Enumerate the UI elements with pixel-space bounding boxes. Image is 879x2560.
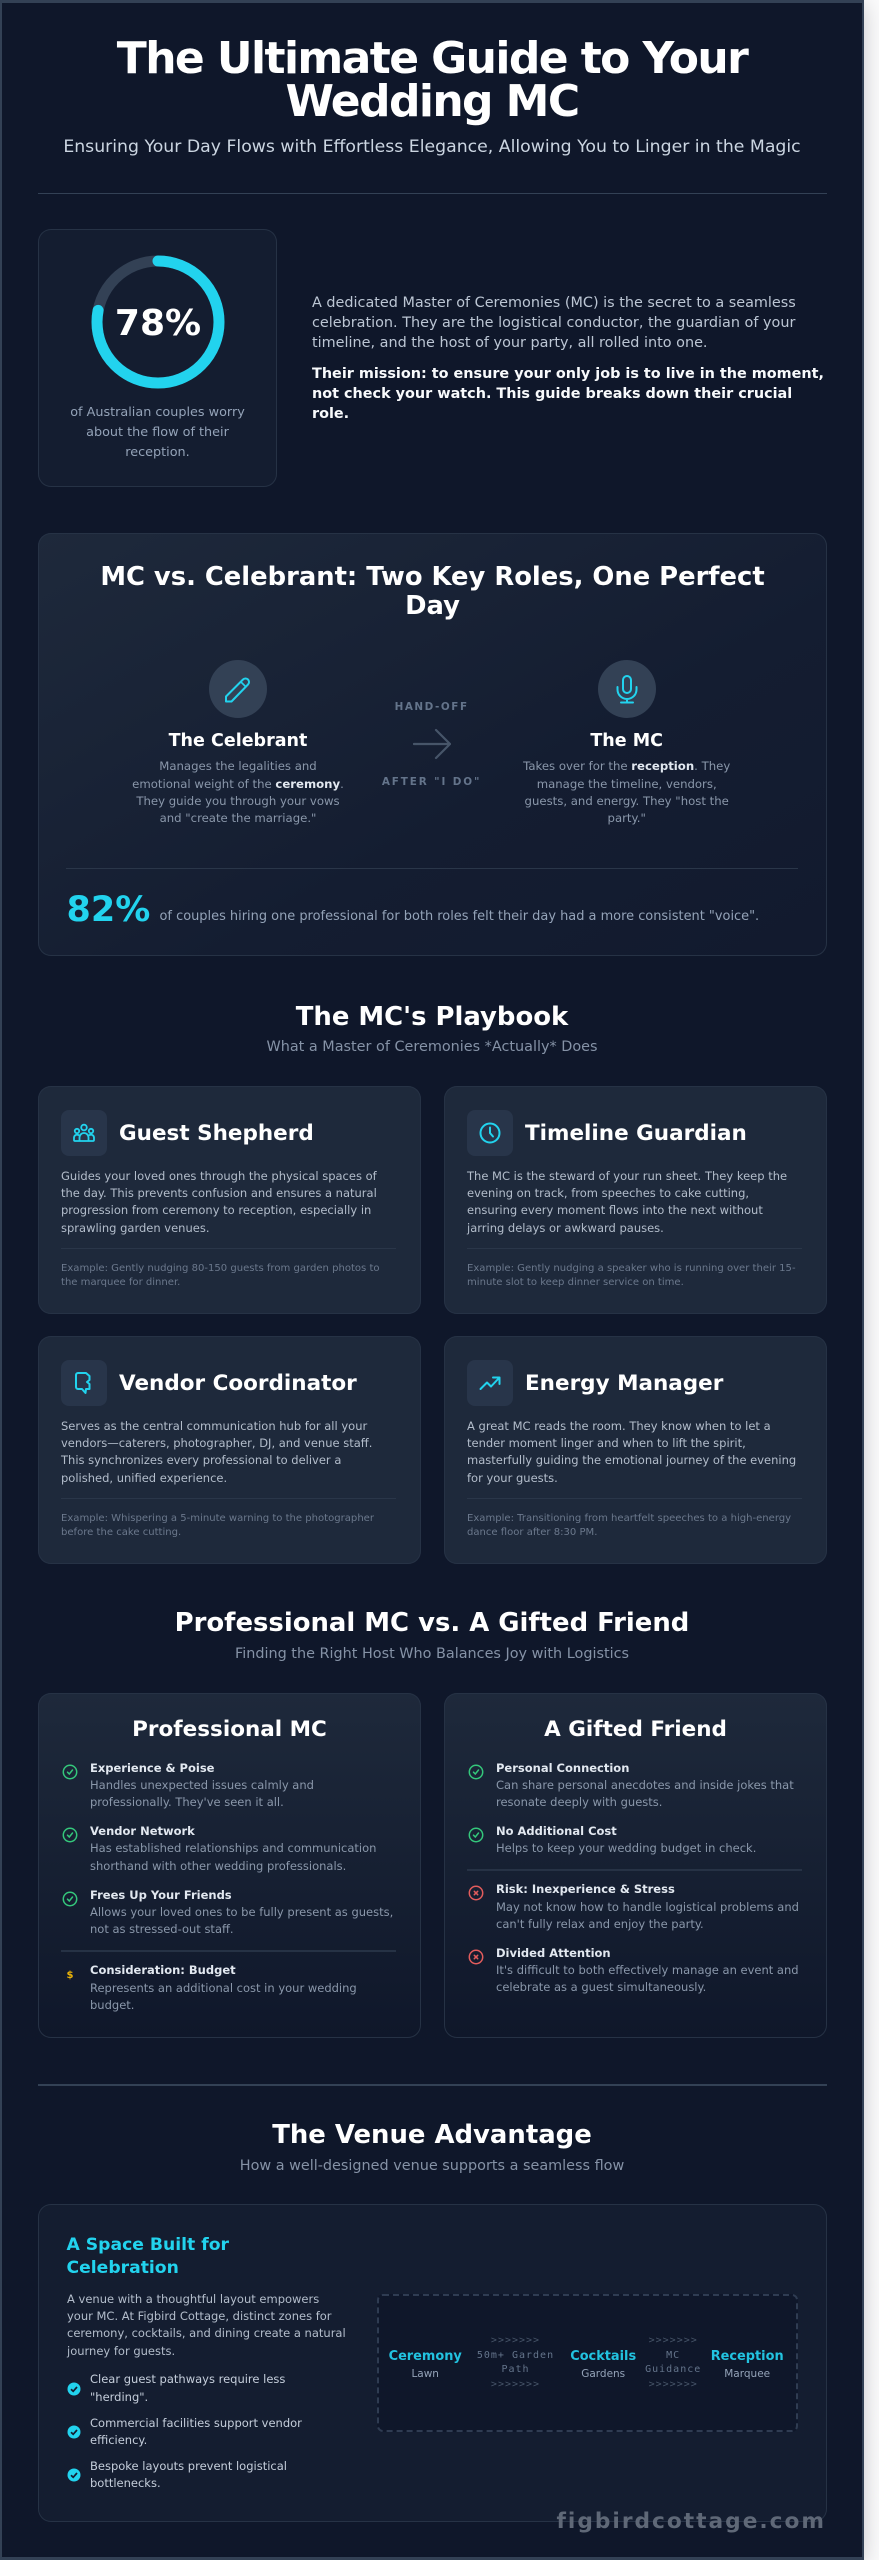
card title: Guest Shepherd: [119, 1120, 314, 1146]
zone: cocktails: Cocktails: [570, 2348, 636, 2364]
panel: guest shepherd: [38, 1086, 421, 1314]
item: frees up friends: Allows your loved ones to be fully present as guests,: [90, 1905, 393, 1919]
panel: 78% stat card: [38, 229, 277, 487]
panel: MC vs Celebrant: [38, 533, 827, 956]
list item: pathways: Clear guest pathways require less: [90, 2372, 285, 2386]
card title: Vendor Coordinator: [119, 1370, 357, 1396]
card body: polished, unified experience.: [61, 1471, 227, 1485]
hand-off label: HAND-OFF: [395, 701, 469, 713]
role: the celebrant: emotional weight of the ceremony.: [132, 777, 344, 791]
list item: layouts: [68, 2459, 287, 2490]
path: garden: Path: [501, 2364, 530, 2375]
list item: facilities: Commercial facilities support vendor: [90, 2416, 302, 2430]
item: no additional cost: No Additional Cost: [496, 1824, 617, 1838]
card body: A great MC reads the room. They know when to let a: [467, 1419, 771, 1433]
path: MC guidance: >>>>>>>: [649, 2379, 698, 2390]
subheading: playbook: What a Master of Ceremonies *Actually* Does: [267, 1039, 597, 1055]
zone: ceremony: [389, 2348, 462, 2380]
item: frees up friends: Frees Up Your Friends: [90, 1888, 232, 1902]
panel: venue: [38, 2204, 827, 2522]
stat caption: [70, 405, 245, 460]
column title: Professional MC: [132, 1717, 327, 1742]
card example: [61, 1263, 380, 1288]
role: the celebrant: Manages the legalities and: [159, 759, 317, 773]
card example: Example: Gently nudging 80-150 guests from garden photos to: [61, 1263, 380, 1274]
list item: pathways: [68, 2372, 285, 2404]
heading: playbook: The MC's Playbook: [296, 1002, 568, 1032]
card body: masterfully guiding the emotional journey of the evening: [467, 1453, 796, 1467]
list item: facilities: [68, 2416, 302, 2447]
list item: pathways: "herding".: [90, 2390, 148, 2404]
venue heading: [66, 2235, 229, 2278]
mission statement: [312, 366, 824, 422]
after I do label: AFTER "I DO": [382, 776, 481, 788]
role: the MC: Takes over for the reception. They: [523, 759, 730, 773]
subheading: professional vs friend: Finding the Right Host Who Balances Joy with Logistics: [235, 1646, 629, 1662]
intro paragraph: celebration. They are the logistical conductor, the guardian of your: [312, 315, 795, 331]
venue paragraph: your MC. At Figbird Cottage, distinct zones for: [67, 2309, 332, 2323]
title: Wedding MC: [285, 76, 579, 127]
item: personal connection: Can share personal anecdotes and inside jokes that: [496, 1778, 794, 1792]
role: the celebrant: The Celebrant: [169, 731, 307, 751]
path: garden: >>>>>>>: [491, 2379, 540, 2390]
stat caption: about the flow of their: [86, 425, 229, 440]
role: the MC: The MC: [590, 731, 663, 751]
role: the MC: manage the timeline, vendors,: [537, 777, 717, 791]
zone: cocktails: [570, 2348, 636, 2380]
heading: [100, 562, 765, 620]
item: frees up friends: [62, 1888, 393, 1936]
card example: [467, 1263, 796, 1288]
list item: layouts: Bespoke layouts prevent logistical: [90, 2459, 287, 2473]
panel: vendor coordinator: [38, 1336, 421, 1564]
intro paragraph: [312, 295, 796, 351]
item: vendor network: Vendor Network: [90, 1824, 195, 1838]
zone: reception: Marquee: [724, 2368, 770, 2380]
role: the celebrant: and "create the marriage.": [160, 811, 316, 825]
card example: minute slot to keep dinner service on time.: [467, 1277, 684, 1288]
title: The Ultimate Guide to Your: [117, 33, 747, 84]
icon: clock: [467, 1110, 513, 1156]
card body: progression from ceremony to reception, especially in: [61, 1203, 371, 1217]
card body: sprawling garden venues.: [61, 1221, 209, 1235]
subtitle: Ensuring Your Day Flows with Effortless Elegance, Allowing You to Linger in the Magic: [63, 137, 801, 157]
panel: professional MC: [38, 1693, 421, 2038]
watermark: figbirdcottage.com: [556, 2509, 826, 2534]
stat caption: reception.: [125, 445, 190, 460]
role: the MC: guests, and energy. They "host the: [525, 794, 729, 808]
card body: vendors—caterers, photographer, DJ, and venue staff.: [61, 1436, 372, 1450]
list item: facilities: efficiency.: [90, 2433, 147, 2447]
chart: 78% progress ring: [92, 256, 224, 388]
item: budget consideration: Represents an additional cost in your wedding: [90, 1981, 357, 1995]
path: MC guidance: MC: [666, 2350, 680, 2361]
card example: Example: Gently nudging a speaker who is running over their 15-: [467, 1263, 796, 1274]
venue paragraph: journey for guests.: [67, 2344, 175, 2358]
item: vendor network: shorthand with other wedding professionals.: [90, 1859, 346, 1873]
panel: energy manager: [444, 1336, 827, 1564]
item: experience: [62, 1761, 314, 1809]
path: garden: >>>>>>>: [491, 2335, 540, 2346]
item: personal connection: resonate deeply with guests.: [496, 1795, 662, 1809]
card body: tender moment linger and when to lift the spirit,: [467, 1436, 746, 1450]
item: vendor network: [62, 1824, 376, 1873]
venue heading: Celebration: [66, 2258, 179, 2278]
item: risk: can't fully relax and enjoy the party.: [496, 1917, 704, 1931]
list item: layouts: bottlenecks.: [90, 2476, 161, 2490]
item: divided attention: It's difficult to both effectively manage an event and: [496, 1963, 799, 1977]
item: experience: professionally. They've seen it all.: [90, 1795, 284, 1809]
arrow: [413, 729, 451, 759]
intro paragraph: A dedicated Master of Ceremonies (MC) is the secret to a seamless: [312, 295, 796, 311]
venue heading: A Space Built for: [66, 2235, 229, 2255]
diagram: venue flow: [376, 2294, 798, 2432]
heading: venue: The Venue Advantage: [272, 2120, 592, 2150]
intro text block: [312, 295, 824, 422]
item: budget consideration: [66, 1963, 357, 2012]
role: the celebrant: They guide you through your vows: [136, 794, 340, 808]
stat description: of couples hiring one professional for both roles felt their day had a more consistent "voice".: [160, 909, 759, 924]
path: MC guidance: >>>>>>>: [649, 2335, 698, 2346]
zone: reception: Reception: [711, 2348, 784, 2364]
stat: 82%: 82%: [66, 890, 150, 930]
item: frees up friends: not as stressed-out staff.: [90, 1922, 234, 1936]
item: no additional cost: [468, 1824, 756, 1855]
card body: Serves as the central communication hub for all your: [61, 1419, 367, 1433]
item: experience: Handles unexpected issues calmly and: [90, 1778, 314, 1792]
card example: dance floor after 8:30 PM.: [467, 1527, 597, 1538]
card body: ensuring every moment flows into the next without: [467, 1203, 763, 1217]
heading: MC vs. Celebrant: Two Key Roles, One Perfect: [100, 562, 765, 592]
venue paragraph: ceremony, cocktails, and dining create a natural: [67, 2326, 346, 2340]
path: MC guidance: [645, 2335, 701, 2390]
item: personal connection: Personal Connection: [496, 1761, 629, 1775]
card example: Example: Transitioning from heartfelt speeches to a high-energy: [467, 1513, 791, 1524]
item: budget consideration: budget.: [90, 1998, 134, 2012]
item: vendor network: Has established relationships and communication: [90, 1841, 376, 1855]
mission statement: role.: [312, 406, 349, 422]
chart: 78% progress ring: 78%: [114, 303, 201, 344]
item: experience: Experience & Poise: [90, 1761, 214, 1775]
item: divided attention: [468, 1946, 799, 1994]
zone: ceremony: Ceremony: [389, 2348, 462, 2364]
card body: [61, 1169, 377, 1235]
subheading: venue: How a well-designed venue supports a seamless flow: [240, 2158, 624, 2174]
item: personal connection: [468, 1761, 794, 1809]
icon: pencil: [209, 660, 267, 718]
zone: ceremony: Lawn: [411, 2368, 439, 2380]
mission statement: not check your watch. This guide breaks down their crucial: [312, 386, 792, 402]
stat caption: of Australian couples worry: [70, 405, 245, 420]
item: budget consideration: Consideration: Budget: [90, 1963, 236, 1977]
panel: timeline guardian: [444, 1086, 827, 1314]
card example: [467, 1513, 791, 1538]
path: MC guidance: Guidance: [645, 2364, 701, 2375]
path: garden: [477, 2335, 554, 2390]
card body: [467, 1419, 796, 1485]
icon: microphone: [598, 660, 656, 718]
card body: This synchronizes every professional to deliver a: [61, 1453, 341, 1467]
card example: Example: Whispering a 5-minute warning to the photographer: [61, 1513, 374, 1524]
item: no additional cost: Helps to keep your wedding budget in check.: [496, 1841, 756, 1855]
icon: people: [61, 1110, 107, 1156]
item: divided attention: Divided Attention: [496, 1946, 611, 1960]
venue paragraph: [66, 2292, 346, 2358]
card body: The MC is the steward of your run sheet. They keep the: [467, 1169, 787, 1183]
item: risk: May not know how to handle logistical problems and: [496, 1900, 799, 1914]
heading: Day: [405, 590, 460, 620]
mission statement: Their mission: to ensure your only job is to live in the moment,: [312, 366, 824, 382]
card body: jarring delays or awkward pauses.: [467, 1221, 664, 1235]
card example: the marquee for dinner.: [61, 1277, 180, 1288]
card body: Guides your loved ones through the physical spaces of: [61, 1169, 377, 1183]
card body: [466, 1169, 787, 1235]
title: [116, 33, 749, 127]
icon: trending up: [467, 1360, 513, 1406]
heading: professional vs friend: Professional MC vs. A Gifted Friend: [175, 1608, 689, 1638]
path: garden: 50m+ Garden: [477, 2350, 554, 2361]
panel: gifted friend: [444, 1693, 827, 2038]
card body: [60, 1419, 372, 1485]
card body: the day. This prevents confusion and ensures a natural: [61, 1186, 377, 1200]
card example: [61, 1513, 374, 1538]
zone: cocktails: Gardens: [581, 2368, 625, 2380]
item: divided attention: celebrate as a guest simultaneously.: [496, 1980, 706, 1994]
role: the MC: [523, 731, 730, 825]
role: the celebrant: [132, 731, 344, 825]
column title: A Gifted Friend: [544, 1717, 727, 1742]
card title: Timeline Guardian: [525, 1120, 747, 1146]
card body: for your guests.: [467, 1471, 558, 1485]
card example: before the cake cutting.: [61, 1527, 181, 1538]
item: risk: [468, 1882, 799, 1931]
item: risk: Risk: Inexperience & Stress: [496, 1882, 675, 1896]
intro paragraph: timeline, and the host of your party, all rolled into one.: [312, 335, 708, 351]
item: budget consideration: $: [66, 1970, 73, 1981]
role: the MC: party.": [608, 811, 646, 825]
card body: evening on track, from speeches to cake cutting,: [467, 1186, 749, 1200]
venue paragraph: A venue with a thoughtful layout empowers: [67, 2292, 319, 2306]
zone: reception: [711, 2348, 784, 2380]
icon: chat bubble: [61, 1360, 107, 1406]
card title: Energy Manager: [525, 1370, 723, 1396]
